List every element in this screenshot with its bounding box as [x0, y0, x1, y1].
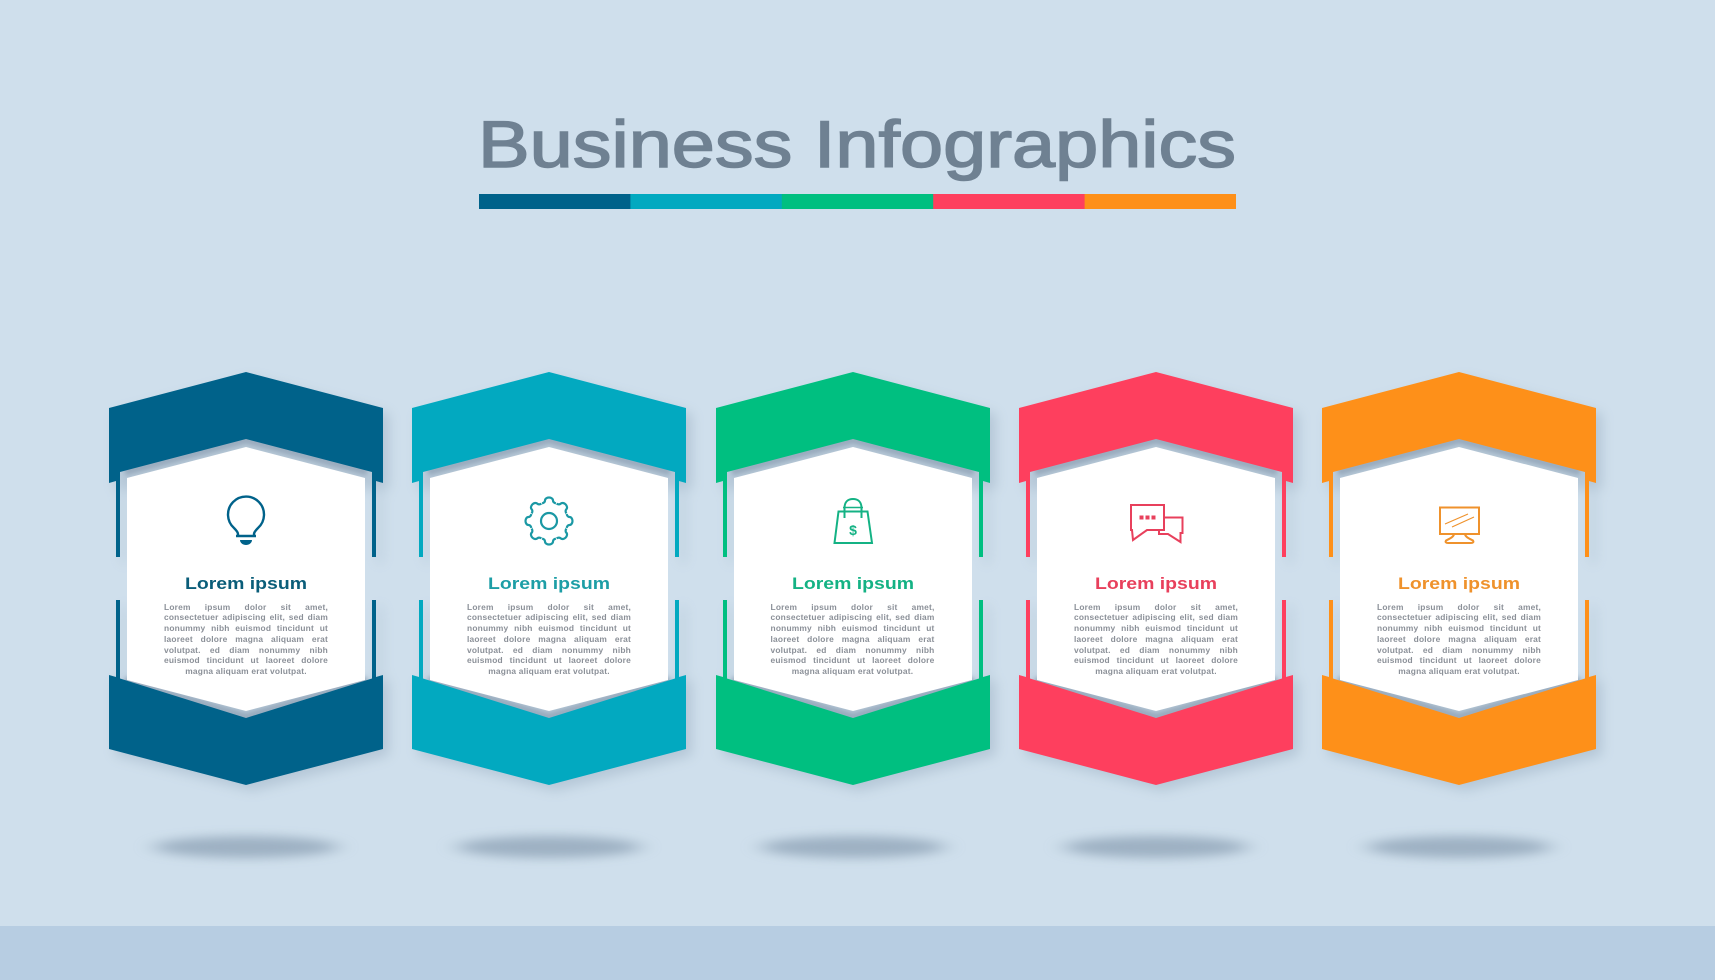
- inner shadow under frame: [732, 440, 974, 717]
- inner shadow under frame: [1035, 440, 1277, 717]
- body text: [1377, 602, 1541, 676]
- body text: Lorem ipsum dolor sit amet,: [467, 602, 631, 612]
- body text: Lorem ipsum dolor sit amet,: [1074, 602, 1238, 612]
- coloured frame: [1322, 372, 1596, 785]
- body text: nonummy nibh euismod tincidunt ut: [1074, 623, 1238, 633]
- body text: consectetuer adipiscing elit, sed diam: [1074, 612, 1238, 622]
- panel: step 2: [412, 372, 695, 862]
- body text: nonummy nibh euismod tincidunt ut: [1377, 623, 1541, 633]
- ground shadow: [154, 836, 338, 858]
- body text: euismod tincidunt ut laoreet dolore: [770, 655, 934, 665]
- card drop shadow: [115, 378, 389, 791]
- body text: nonummy nibh euismod tincidunt ut: [467, 623, 631, 633]
- footer strip: [0, 926, 1715, 980]
- body text: laoreet dolore magna aliquam erat: [1377, 634, 1541, 644]
- ground shadow: [1064, 836, 1248, 858]
- heading: Lorem ipsum: [792, 574, 914, 593]
- card graphic: step 3: [716, 372, 999, 862]
- coloured frame: [412, 372, 686, 785]
- card graphic: step 2: [412, 372, 695, 862]
- body text: magna aliquam erat volutpat.: [1095, 666, 1217, 676]
- body text: magna aliquam erat volutpat.: [1398, 666, 1520, 676]
- body text: magna aliquam erat volutpat.: [185, 666, 307, 676]
- body text: volutpat. ed diam nonummy nibh: [1074, 645, 1238, 655]
- white hexagon: [1340, 447, 1578, 711]
- heading: Lorem ipsum: [185, 574, 307, 593]
- heading: Lorem ipsum: [488, 574, 610, 593]
- body text: [1074, 602, 1238, 676]
- body text: euismod tincidunt ut laoreet dolore: [164, 655, 328, 665]
- white hexagon: [1037, 447, 1275, 711]
- body text: volutpat. ed diam nonummy nibh: [467, 645, 631, 655]
- white hexagon: [127, 447, 365, 711]
- body text: consectetuer adipiscing elit, sed diam: [1377, 612, 1541, 622]
- card drop shadow: [1328, 378, 1602, 791]
- inner shadow under frame: [125, 440, 367, 717]
- body text: nonummy nibh euismod tincidunt ut: [164, 623, 328, 633]
- coloured frame: [1019, 372, 1293, 785]
- icon: gear: [526, 498, 572, 544]
- heading: Lorem ipsum: [1398, 574, 1520, 593]
- body text: volutpat. ed diam nonummy nibh: [770, 645, 934, 655]
- icon: shopping bag: $: [849, 522, 857, 538]
- body text: laoreet dolore magna aliquam erat: [164, 634, 328, 644]
- body text: consectetuer adipiscing elit, sed diam: [467, 612, 631, 622]
- body text: euismod tincidunt ut laoreet dolore: [1377, 655, 1541, 665]
- card drop shadow: [418, 378, 692, 791]
- icon: chat bubbles: [1131, 505, 1182, 542]
- card graphic: step 1: [109, 372, 392, 862]
- icon: monitor: [1440, 508, 1479, 543]
- panel: step 1: [109, 372, 392, 862]
- body text: Lorem ipsum dolor sit amet,: [164, 602, 328, 612]
- body text: [164, 602, 328, 676]
- body text: laoreet dolore magna aliquam erat: [1074, 634, 1238, 644]
- body text: [770, 602, 934, 676]
- coloured frame: [716, 372, 990, 785]
- body text: euismod tincidunt ut laoreet dolore: [1074, 655, 1238, 665]
- body text: consectetuer adipiscing elit, sed diam: [770, 612, 934, 622]
- coloured frame: [109, 372, 383, 785]
- body text: volutpat. ed diam nonummy nibh: [164, 645, 328, 655]
- icon: light bulb: [228, 497, 264, 545]
- panel: step 4: [1019, 372, 1302, 862]
- ground shadow: [760, 836, 944, 858]
- card graphic: step 4: [1019, 372, 1302, 862]
- card drop shadow: [1025, 378, 1299, 791]
- title: Business Infographics: [478, 107, 1236, 181]
- panel: step 3: [716, 372, 999, 862]
- body text: [467, 602, 631, 676]
- ground shadow: [457, 836, 641, 858]
- body text: laoreet dolore magna aliquam erat: [770, 634, 934, 644]
- white hexagon: [734, 447, 972, 711]
- card graphic: step 5: [1322, 372, 1605, 862]
- heading: Lorem ipsum: [1095, 574, 1217, 593]
- body text: consectetuer adipiscing elit, sed diam: [164, 612, 328, 622]
- inner shadow under frame: [1338, 440, 1580, 717]
- body text: magna aliquam erat volutpat.: [792, 666, 913, 676]
- body text: magna aliquam erat volutpat.: [488, 666, 610, 676]
- inner shadow under frame: [428, 440, 670, 717]
- card drop shadow: [722, 378, 996, 791]
- body text: nonummy nibh euismod tincidunt ut: [770, 623, 934, 633]
- white hexagon: [430, 447, 668, 711]
- body text: Lorem ipsum dolor sit amet,: [1377, 602, 1541, 612]
- body text: Lorem ipsum dolor sit amet,: [770, 602, 934, 612]
- body text: euismod tincidunt ut laoreet dolore: [467, 655, 631, 665]
- body text: volutpat. ed diam nonummy nibh: [1377, 645, 1541, 655]
- title colour bar: [479, 194, 1236, 209]
- body text: laoreet dolore magna aliquam erat: [467, 634, 631, 644]
- icon: shopping bag: [834, 499, 872, 543]
- panel: step 5: [1322, 372, 1605, 862]
- ground shadow: [1367, 836, 1551, 858]
